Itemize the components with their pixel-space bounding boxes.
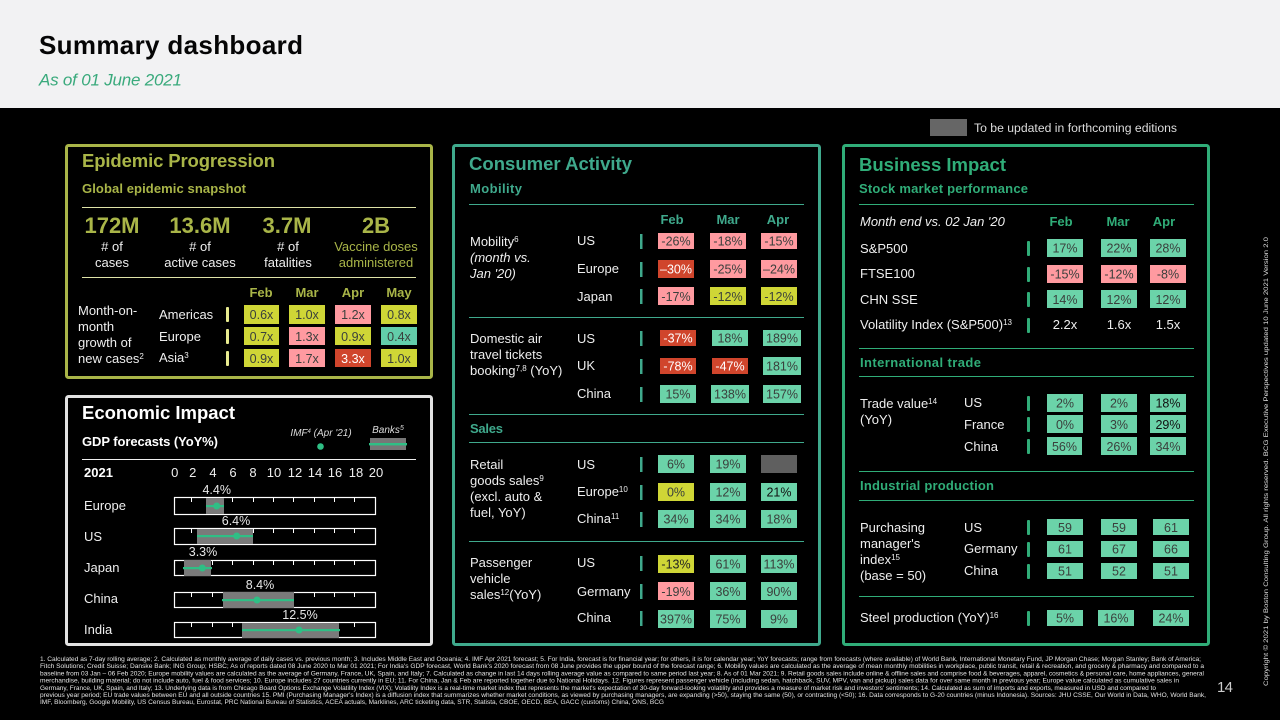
row: trade France: 0% (1056, 418, 1074, 432)
text: trade value label: Trade value (860, 396, 928, 411)
row: volatility index: 1.5x (1156, 317, 1181, 332)
row: Americas: 0.6x (250, 308, 274, 322)
text: mobility label: 6 (514, 235, 519, 244)
row: vehicles US: US (577, 555, 595, 570)
row: vehicles US: 113% (763, 558, 795, 572)
row: vehicles China: 397% (660, 612, 692, 626)
legend: IMF: (Apr '21) (311, 428, 352, 439)
text: air travel label: Domestic air (470, 331, 543, 346)
row: retail Europe: Europe (577, 484, 619, 499)
stat: vaccine doses: 2B (362, 213, 390, 238)
legend: banks (369, 425, 407, 450)
row: retail US: 19% (715, 458, 741, 472)
axis labels: 8 (249, 465, 257, 480)
stat: active cases: # of (189, 239, 211, 254)
text: PMI label: Purchasing (860, 520, 925, 535)
row: mobility Europe: –30% (660, 262, 692, 276)
row: air UK (577, 357, 801, 375)
axis labels: 10 (267, 465, 281, 480)
footnotes: Fitch Solutions; Credit Suisse; Danske Bank; ING Group; HSBC; As of reports dated 08 June 2020 to Mar 01 2021; For India's GDP forecast, World Bank's 2020 forecast from 08 June provides the upper bound of the forecast range; 6. Mobility values are calculated as the average of mean monthly mobilities in workplace, public transit, retail & recreation, and grocery & pharmacy and compared to a (40, 663, 1205, 670)
row: Europe: 0.7x (250, 330, 274, 344)
month headers: Apr (767, 212, 789, 227)
stat: fatalities: # of (277, 239, 299, 254)
axis labels: 14 (308, 465, 322, 480)
row: trade China (964, 437, 1186, 455)
range bar: India: India (84, 622, 113, 637)
text: PMI label: manager's (860, 536, 921, 551)
range bar: India: 12.5% (282, 608, 318, 622)
row: vehicles Germany (577, 582, 797, 600)
row: CHN SSE: 12% (1106, 293, 1132, 307)
row: Americas: Americas (159, 307, 214, 322)
row: Americas: 0.8x (387, 308, 412, 322)
stat: vaccine doses: administered (339, 255, 413, 270)
text: passenger vehicle label (470, 555, 541, 602)
text: trade value label (860, 396, 938, 427)
row: volatility index (860, 317, 1181, 333)
stat: active cases: active cases (164, 255, 236, 270)
row: retail US (577, 455, 797, 473)
row: air UK: 181% (766, 360, 798, 374)
stat: fatalities: 3.7M (263, 213, 311, 238)
row: air China: 138% (714, 388, 746, 402)
stat: cases: 172M (84, 213, 140, 238)
row: PMI China: 52 (1112, 564, 1126, 578)
row: trade China: 26% (1106, 440, 1132, 454)
row description: month-on-month growth: Month-on- (78, 303, 137, 318)
axis labels: 4 (209, 465, 217, 480)
stat: active cases: 13.6M (169, 213, 231, 238)
row: vehicles US (577, 555, 797, 573)
legend: IMF (290, 428, 352, 450)
row: air US: -37% (663, 332, 693, 346)
text: mobility label: (month vs. (470, 250, 531, 265)
row: Europe (159, 327, 417, 345)
stat: vaccine doses: Vaccine doses (334, 239, 418, 254)
row: steel production (860, 610, 1189, 626)
row: vehicles Germany: 90% (766, 585, 792, 599)
axis labels: 16 (328, 465, 342, 480)
row: CHN SSE (860, 290, 1186, 308)
row: trade France (964, 415, 1186, 433)
row: retail China: 11 (611, 512, 620, 521)
row: S&P500: S&P500 (860, 241, 908, 256)
row: trade US: 2% (1110, 396, 1128, 410)
text: PMI label: (base = 50) (860, 568, 926, 583)
subheading: sales: Sales (470, 421, 503, 436)
stat: fatalities (263, 213, 312, 270)
text: air travel label: travel tickets (470, 347, 543, 362)
row: Asia: 0.9x (250, 352, 274, 366)
row: S&P500 (860, 239, 1186, 257)
row: volatility index: 13 (1003, 318, 1013, 327)
row: mobility Japan: -17% (661, 290, 691, 304)
row description: month-on-month growth: growth of (78, 335, 132, 350)
title: Summary dashboard (39, 30, 303, 60)
row: retail Europe: 21% (766, 486, 792, 500)
row: trade US: US (964, 395, 982, 410)
row: retail Europe (577, 483, 797, 501)
text: passenger vehicle label: sales (470, 587, 500, 602)
row: mobility US (577, 233, 797, 249)
row: PMI Germany: 61 (1058, 542, 1072, 556)
row: FTSE100: FTSE100 (860, 266, 915, 281)
month headers: Feb (660, 212, 684, 227)
row: vehicles China (577, 610, 797, 628)
row: air UK: -47% (715, 360, 745, 374)
row: PMI US: 59 (1112, 521, 1126, 535)
text: air travel label: booking (470, 363, 516, 378)
stat: cases: # of (101, 239, 123, 254)
row: Asia (159, 349, 417, 367)
range bar: Europe: 4.4% (202, 483, 231, 497)
row: PMI China (964, 563, 1189, 579)
footnotes: 1. Calculated as 7-day rolling average; 2. Calculated as monthly average of daily cases vs. previous month; 3. Includes Middle East and Oceania; 4. IMF Apr 2021 forecast; 5. For India, forecast is for financial year; for others, it is for calendar year; YoY forecasts; range from forecasts (where available) of World Bank, International Monetary Fund, JP Morgan Chase; Morgan Stanley; Bank of America; (40, 656, 1201, 663)
row: PMI US: US (964, 520, 982, 535)
month headers: Mar (295, 285, 319, 300)
row: CHN SSE: CHN SSE (860, 292, 918, 307)
range bar: India (84, 608, 376, 638)
month headers: Apr (342, 285, 364, 300)
text: month end note and headers: Mar (1106, 214, 1130, 229)
row: trade France: 3% (1110, 418, 1128, 432)
row: vehicles US: -13% (661, 558, 691, 572)
row: FTSE100 (860, 265, 1186, 283)
month headers: Feb (249, 285, 273, 300)
legend: banks: Banks (372, 425, 400, 436)
footnotes: IMF, Bloomberg, Google Mobility, US Census Bureau, Eurostat, PRC National Bureau of Statistics, ACEA actuals, Marklines, ARC ticketing data, STR, Statista, CBOE, OECD, BEA, GACC (customs) China, ONS, BCG (40, 699, 664, 706)
row: Europe: 0.4x (387, 330, 412, 344)
row: Asia: Asia (159, 350, 184, 365)
row: mobility US: US (577, 233, 595, 248)
row: Asia: 3.3x (341, 352, 366, 366)
row: mobility Japan: -12% (713, 290, 743, 304)
row description: month-on-month growth: month (78, 319, 114, 334)
row: S&P500: 22% (1106, 242, 1132, 256)
range bar: Japan: 3.3% (189, 545, 217, 559)
row: trade US: 18% (1155, 396, 1181, 410)
row: retail US: US (577, 457, 595, 472)
row: air US: US (577, 331, 595, 346)
copyright vertical text: Copyright © 2021 by Boston Consulting Group. All rights reserved. BCG Executive Perspectives updated 10 June 2021 Version 2.0 (1262, 237, 1270, 686)
text: passenger vehicle label: 12 (500, 588, 510, 597)
heading: epidemic progression: Epidemic Progression (82, 150, 275, 171)
axis labels: 2021 (84, 465, 113, 480)
panel: economic impact (66, 396, 432, 644)
stat: vaccine doses (334, 213, 418, 270)
footnotes: previous year period; EU trade values between EU and all outside countries 15. PMI (Purchasing Manager's Index) is a diffusion index that summarizes whether market conditions, as viewed by purchasing managers, are expanding (>50), staying the same (50), or contracting (<50); 16. Data corresponds to G-20 countries (minus Indonesia). Sources: JHU CSSE, Our World in Data, WHO, World Bank, (40, 692, 1206, 699)
row: PMI Germany: 66 (1164, 542, 1178, 556)
legend: banks: 5 (400, 425, 404, 432)
month headers (249, 285, 412, 300)
row: mobility Europe (577, 260, 797, 278)
text: month end note and headers (860, 214, 1175, 229)
row: air US: 18% (717, 332, 743, 346)
subheading: GDP forecasts: GDP forecasts (YoY%) (82, 434, 218, 449)
axis labels: 0 (171, 465, 178, 480)
row: steel production: 5% (1056, 612, 1074, 626)
range bar: US: 6.4% (222, 514, 250, 528)
row: Asia: 1.7x (295, 352, 320, 366)
row: vehicles Germany: -19% (661, 585, 691, 599)
row: steel production: 16 (990, 611, 999, 620)
axis labels: 2 (189, 465, 196, 480)
row: retail US: 6% (667, 458, 685, 472)
row: volatility index: 1.6x (1107, 317, 1132, 332)
range bar: US: US (84, 529, 102, 544)
row: trade China: China (964, 439, 999, 454)
text: retail label: 9 (539, 474, 544, 483)
row: PMI US: 59 (1058, 521, 1072, 535)
row: mobility Japan (577, 287, 797, 305)
row: trade US: 2% (1056, 396, 1074, 410)
axis labels: 6 (229, 465, 237, 480)
text: retail label: Retail (470, 457, 503, 472)
row: vehicles Germany: 36% (715, 585, 741, 599)
month headers (660, 212, 789, 227)
row: PMI Germany: Germany (964, 541, 1018, 556)
text: trade value label: 14 (928, 397, 938, 406)
heading: business impact: Business Impact (859, 154, 1006, 175)
row: retail China: 34% (715, 512, 741, 526)
row: S&P500: 28% (1155, 242, 1181, 256)
subheading: mobility: Mobility (470, 181, 523, 196)
row: Europe: 0.9x (341, 330, 366, 344)
panel: business impact (844, 146, 1208, 644)
text: retail label: goods sales (470, 473, 539, 488)
panel: consumer activity (454, 146, 820, 644)
legend: to be updated: To be updated in forthcoming editions (974, 121, 1177, 135)
month headers: May (386, 285, 412, 300)
row: vehicles Germany: Germany (577, 584, 631, 599)
text: mobility label: Jan '20) (469, 266, 516, 281)
row: vehicles China: 75% (715, 612, 741, 626)
text: month end note and headers: Apr (1153, 214, 1175, 229)
axis labels: 20 (369, 465, 383, 480)
page number: 14 (1217, 679, 1233, 696)
row: air China (577, 385, 801, 403)
range bar: US (84, 514, 376, 544)
legend: IMF: 4 (308, 429, 312, 435)
row: trade France: France (964, 417, 1004, 432)
row: FTSE100: -15% (1050, 268, 1080, 282)
footnotes: merchandise, building material; do not include auto, fuel & food services; 10. Europe includes 27 countries currently in EU; 11. For China, Jan & Feb are reported together due to National Holidays. 12. Figures represent passenger vehicle (including sedan, hatchback, SUV, MPV, van and pickup) sales data for over same month in previous year; Europe value calculated as cumulative sales in (40, 678, 1180, 685)
stat: fatalities: fatalities (264, 255, 312, 270)
row: vehicles China: China (577, 610, 612, 625)
range bar: China: 8.4% (246, 578, 274, 592)
row: retail Europe: 0% (667, 486, 685, 500)
row: PMI China: 51 (1164, 564, 1178, 578)
row: Americas: 1.2x (341, 308, 366, 322)
axis labels (84, 465, 383, 480)
heading: consumer activity: Consumer Activity (469, 153, 633, 174)
row: retail China: 34% (663, 512, 689, 526)
text: air travel label (470, 331, 562, 378)
row: PMI China: China (964, 563, 999, 578)
row: trade China: 56% (1052, 440, 1077, 454)
row: steel production: 24% (1158, 612, 1184, 626)
subheading: global snapshot: Global epidemic snapshot (82, 181, 247, 196)
row: air China: 15% (665, 388, 691, 402)
row: steel production: Steel production (YoY) (860, 610, 990, 625)
row: Europe: Europe (159, 329, 201, 344)
row: PMI Germany: 67 (1112, 542, 1126, 556)
text: air travel label: (YoY) (527, 363, 562, 378)
axis labels: 12 (288, 465, 302, 480)
row: mobility Japan: -12% (764, 290, 794, 304)
text: PMI label: index (860, 552, 891, 567)
text: passenger vehicle label: Passenger (470, 555, 533, 570)
header band (0, 0, 1280, 108)
row: Americas (159, 305, 417, 324)
row: retail China: China (577, 511, 611, 526)
row: Europe: 1.3x (295, 330, 320, 344)
legend: IMF: IMF (290, 428, 308, 439)
row: vehicles US: 61% (715, 558, 741, 572)
row: PMI US (964, 519, 1189, 535)
row: Asia: 3 (184, 351, 189, 360)
axis labels: 18 (349, 465, 363, 480)
row description: month-on-month growth: 2 (139, 352, 144, 361)
range bar: Europe (84, 483, 376, 514)
stat: active cases (164, 213, 236, 270)
stat: cases: cases (95, 255, 129, 270)
row: PMI US: 61 (1164, 521, 1178, 535)
row: PMI China: 51 (1058, 564, 1072, 578)
row description: month-on-month growth: new cases (78, 351, 139, 366)
row: mobility Europe: Europe (577, 261, 619, 276)
footnotes (40, 656, 1206, 706)
row: CHN SSE: 12% (1155, 293, 1181, 307)
row: retail Europe: 10 (619, 485, 628, 494)
footnotes: Germany, France, UK, Spain, and Italy; 13. Underlying data is from Chicago Board Options Exchange Volatility Index (VIX); Volatility Index is a real-time market index that represents the market's expectation of 30-day forward-looking volatility and provides a measure of market risk and investors' sentiments; 14. Calculated as sum of imports and exports, measured in USD and compared to (40, 685, 1157, 692)
row: PMI Germany (964, 541, 1189, 557)
row: trade France: 29% (1155, 418, 1181, 432)
row: trade China: 34% (1155, 440, 1181, 454)
row: trade US (964, 394, 1186, 412)
stat: cases (84, 213, 140, 270)
row: volatility index: 2.2x (1053, 317, 1078, 332)
range bar: Japan (84, 545, 376, 576)
row: mobility Japan: Japan (577, 289, 612, 304)
subheading: international trade: International trade (860, 355, 981, 370)
row: mobility US: -15% (764, 234, 794, 248)
text: PMI label: 15 (891, 553, 901, 562)
row: mobility US: -26% (661, 234, 691, 248)
legend: to be updated (930, 119, 1177, 136)
row: mobility Europe: -25% (713, 262, 743, 276)
row: air UK: UK (577, 358, 595, 373)
text: passenger vehicle label: vehicle (470, 571, 510, 586)
row: volatility index: Volatility Index (S&P500) (860, 317, 1003, 332)
row: retail Europe: 12% (715, 486, 741, 500)
row: mobility US: -18% (713, 234, 743, 248)
range bar: China (84, 578, 376, 608)
month headers: Mar (716, 212, 740, 227)
row: retail China: 18% (766, 512, 792, 526)
text: passenger vehicle label: (YoY) (509, 587, 541, 602)
row: air China: China (577, 386, 612, 401)
subheading: industrial production: Industrial production (860, 478, 994, 493)
heading: economic impact: Economic Impact (82, 402, 235, 423)
text: mobility label (469, 234, 531, 281)
subheading: stock market performance: Stock market performance (859, 181, 1028, 196)
text: month end note and headers: Month end vs. 02 Jan '20 (860, 214, 1006, 229)
range bar: China: China (84, 591, 119, 606)
row: air US: 189% (766, 332, 798, 346)
row: vehicles China: 9% (770, 612, 788, 626)
row: air US (577, 330, 801, 346)
row: CHN SSE: 14% (1052, 293, 1078, 307)
range bar: Japan: Japan (84, 560, 119, 575)
row: Asia: 1.0x (387, 352, 412, 366)
row description: month-on-month growth (78, 303, 144, 366)
row: Americas: 1.0x (295, 308, 320, 322)
text: air travel label: 7,8 (516, 364, 527, 373)
row: S&P500: 17% (1052, 242, 1078, 256)
text: retail label: fuel, YoY) (470, 505, 526, 520)
text: month end note and headers: Feb (1049, 214, 1073, 229)
footnotes: baseline from 03 Jan – 06 Feb 2020; Europe mobility values are calculated as the average of Germany, France, UK, Spain, and Italy; 7. Calculated as change in last 14 days rolling average value as compared to same period last year; 8. As of 01 Mar 2021; 9. Retail goods sales include online & offline sales and comprise food & beverages, apparel, cosmetics & personal care, home appliances, general (40, 670, 1204, 677)
text: trade value label: (YoY) (860, 412, 892, 427)
text: retail label: (excl. auto & (470, 489, 543, 504)
row: mobility Europe: –24% (763, 262, 795, 276)
row: retail China (577, 510, 797, 528)
range bar: Europe: Europe (84, 498, 126, 513)
text: retail label (470, 457, 544, 520)
row: air UK: -78% (663, 360, 693, 374)
text: mobility label: Mobility (470, 234, 514, 249)
row: FTSE100: -12% (1104, 268, 1134, 282)
row: FTSE100: -8% (1157, 268, 1179, 282)
subtitle date: As of 01 June 2021 (38, 70, 182, 90)
text: PMI label (860, 520, 926, 583)
row: steel production: 16% (1103, 612, 1129, 626)
row: air China: 157% (766, 388, 798, 402)
panel: epidemic progression (66, 146, 432, 378)
